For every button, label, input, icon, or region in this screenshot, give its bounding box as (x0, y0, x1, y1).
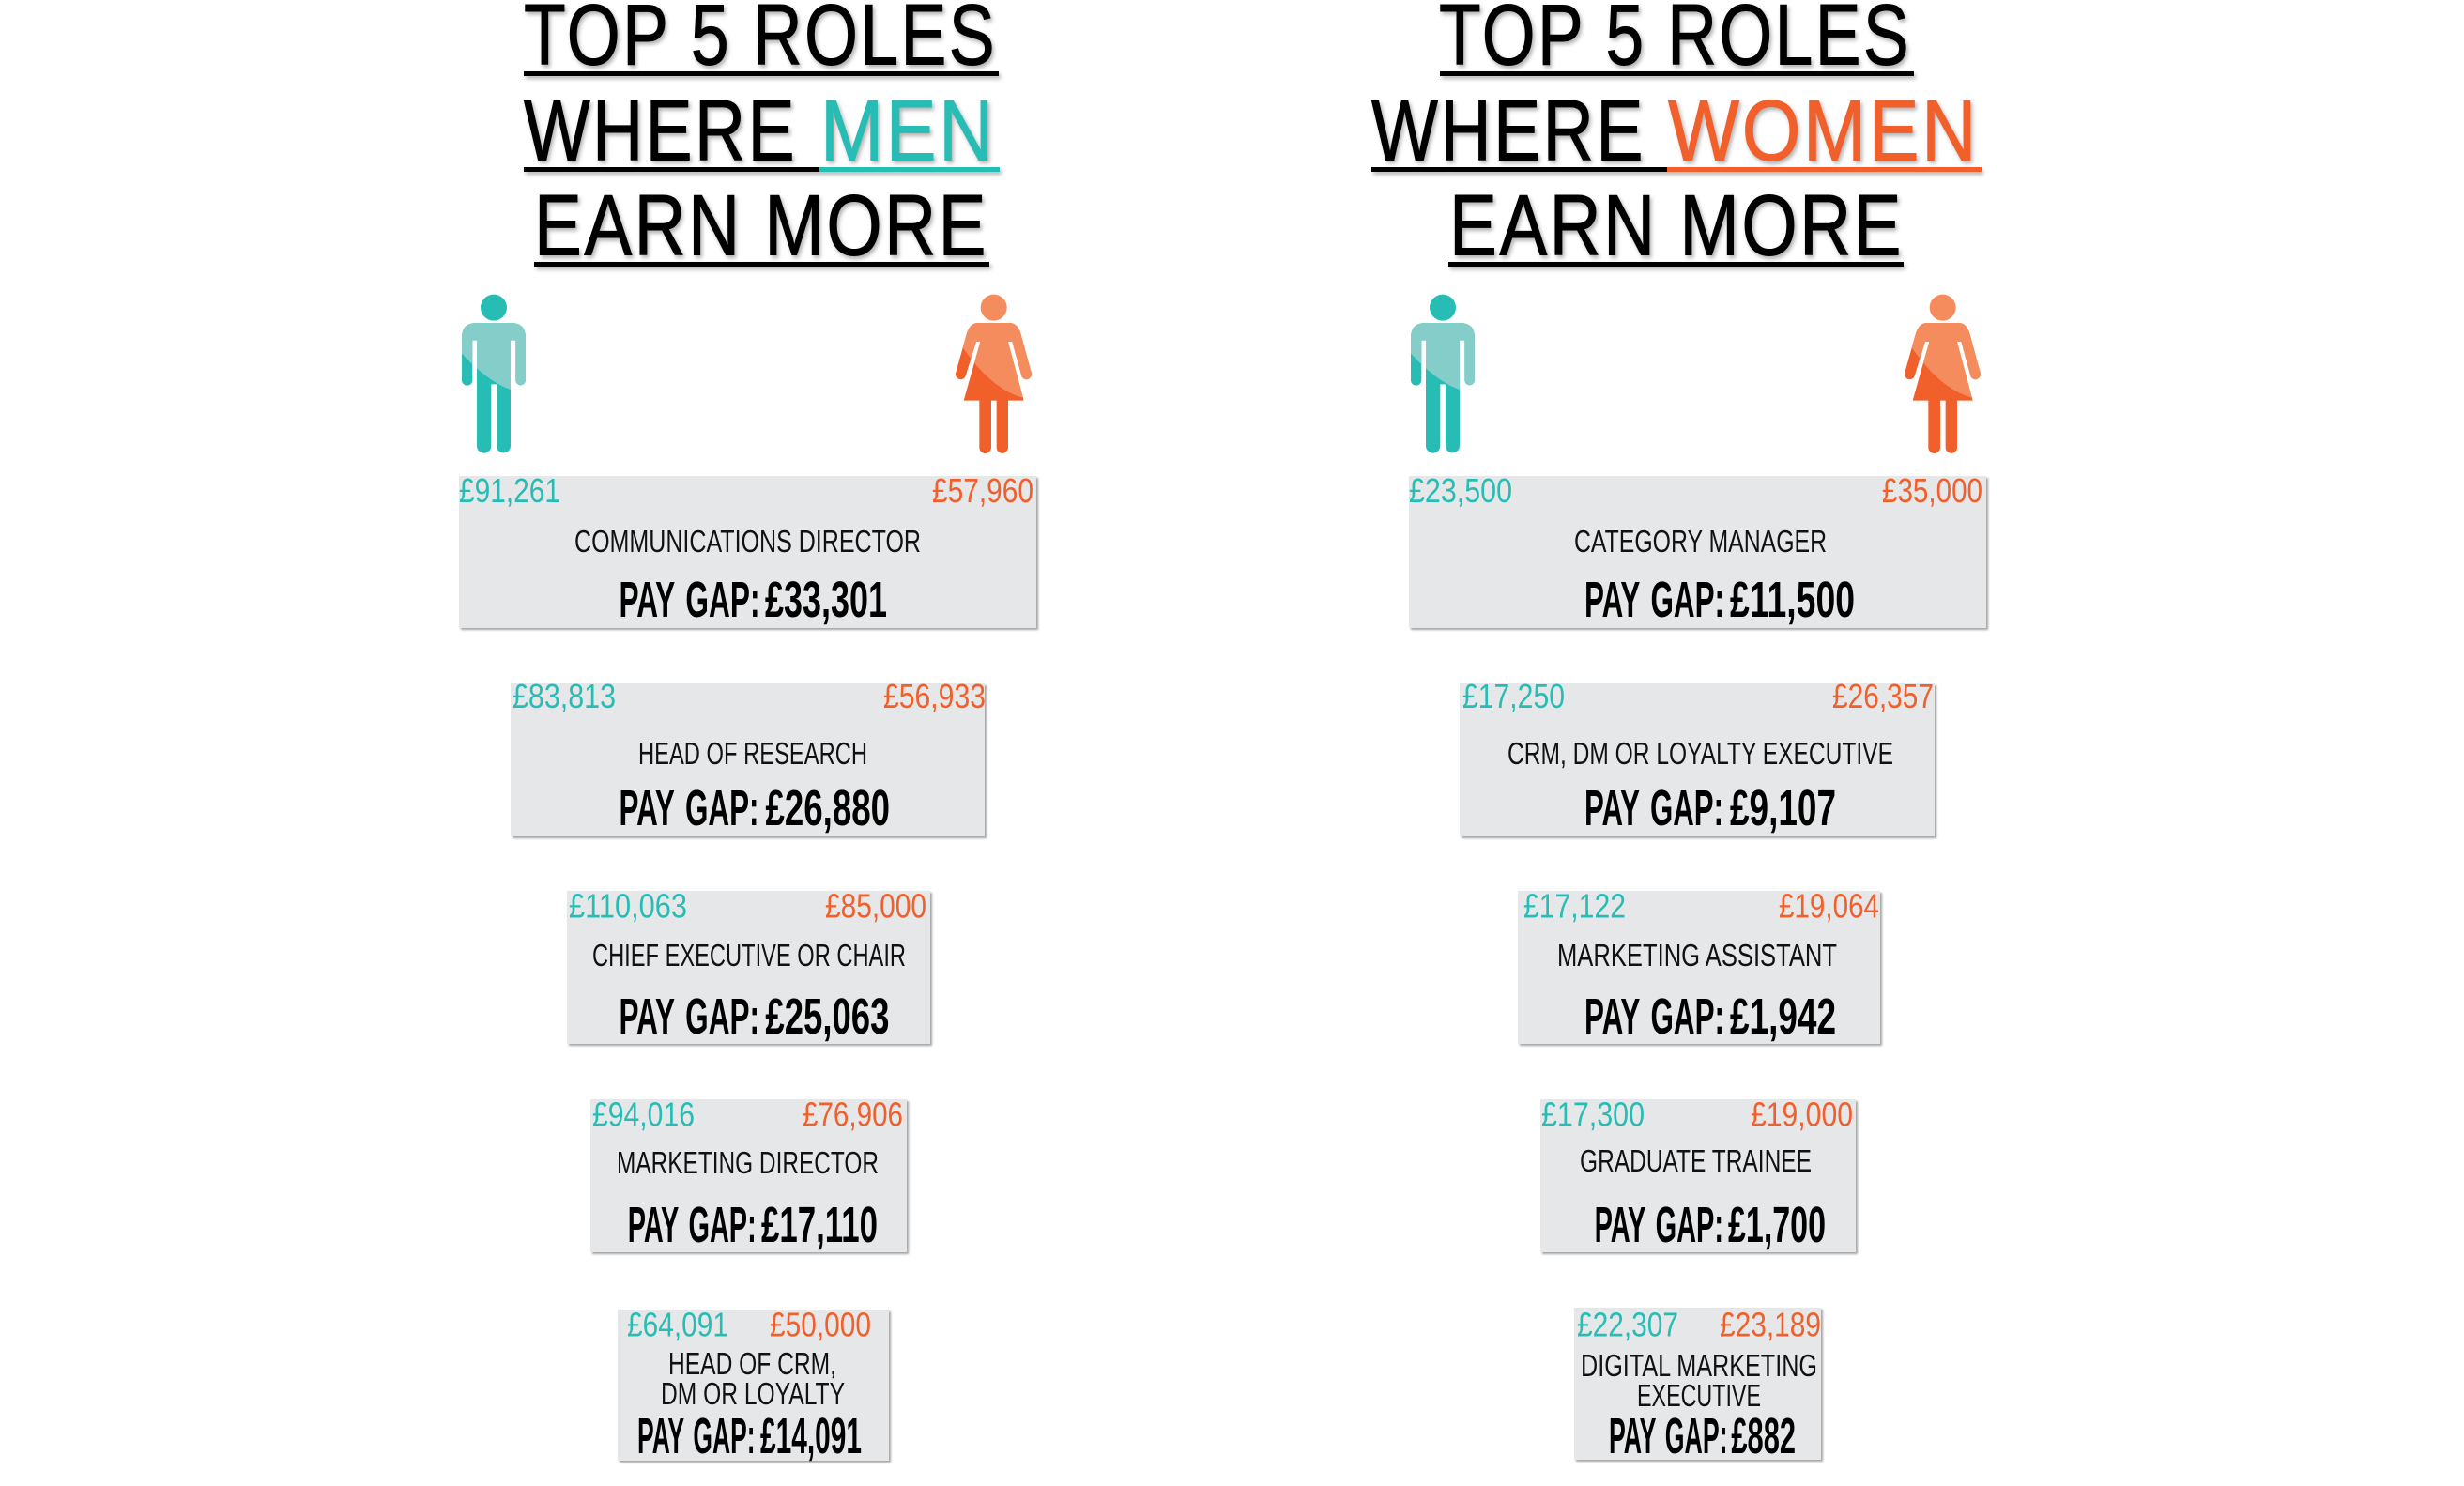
men's salary: £91,261 (459, 471, 560, 510)
role: COMMUNICATIONS DIRECTOR (574, 524, 921, 559)
panel: crm, dm or loyalty executive (1460, 677, 1936, 838)
women's salary: £23,189 (1720, 1305, 1821, 1344)
pay gap: £1,942 (1730, 988, 1836, 1045)
title: top 5 roles where women earn more: WOMEN (1668, 83, 1979, 178)
title: top 5 roles where men earn more: WHERE (524, 83, 797, 178)
title: top 5 roles where women earn more: WHERE (1371, 83, 1645, 178)
men's salary: £83,813 (513, 677, 616, 715)
men's salary: £23,500 (1409, 471, 1512, 510)
role (661, 1346, 845, 1411)
icon: man, right column (1411, 295, 1475, 453)
pay gap: PAY GAP: (620, 780, 758, 836)
pay gap: £17,110 (761, 1197, 878, 1253)
panel: marketing assistant (1518, 886, 1882, 1046)
men's salary: £17,300 (1541, 1095, 1645, 1134)
title: top 5 roles where men earn more: MEN (820, 83, 996, 178)
pay gap: PAY GAP: (1595, 1197, 1723, 1253)
pay gap: PAY GAP: (637, 1408, 756, 1464)
women's salary: £76,906 (803, 1095, 903, 1134)
role: DIGITAL MARKETING (1581, 1348, 1817, 1383)
role: MARKETING DIRECTOR (617, 1145, 879, 1180)
pay gap: PAY GAP: (620, 988, 759, 1045)
role: CATEGORY MANAGER (1574, 524, 1827, 559)
role: EXECUTIVE (1637, 1378, 1761, 1413)
women's salary: £19,000 (1751, 1095, 1853, 1134)
title: top 5 roles where women earn more: EARN MORE (1449, 178, 1904, 274)
role: MARKETING ASSISTANT (1557, 938, 1837, 973)
role: HEAD OF CRM, (668, 1346, 836, 1381)
men's salary: £110,063 (569, 886, 687, 926)
title: top 5 roles where women earn more (1371, 0, 1982, 274)
men's salary: £64,091 (627, 1305, 728, 1344)
women's salary: £50,000 (770, 1305, 871, 1344)
men's salary: £22,307 (1577, 1305, 1678, 1344)
women's salary: £56,933 (883, 677, 986, 715)
panel: category manager (1409, 471, 1988, 630)
pay gap: £14,091 (760, 1408, 862, 1464)
women's salary: £35,000 (1882, 471, 1982, 510)
pay gap: PAY GAP: (628, 1197, 757, 1253)
panel: graduate trainee (1540, 1095, 1858, 1254)
icon: woman, right column (1905, 295, 1981, 453)
role: CHIEF EXECUTIVE OR CHAIR (592, 938, 906, 973)
panel: digital marketing executive (1574, 1305, 1823, 1464)
panel: head of crm, dm or loyalty (618, 1305, 891, 1464)
role: HEAD OF RESEARCH (638, 736, 867, 771)
title: top 5 roles where men earn more (524, 0, 1000, 274)
pay gap: PAY GAP: (1584, 988, 1724, 1045)
pay gap: PAY GAP: (1609, 1408, 1727, 1464)
pay gap: £25,063 (765, 988, 889, 1045)
role: DM OR LOYALTY (661, 1376, 845, 1411)
pay gap: PAY GAP: (620, 572, 760, 628)
icon: woman, left column (956, 295, 1032, 453)
role: CRM, DM OR LOYALTY EXECUTIVE (1507, 736, 1893, 771)
pay gap: £26,880 (766, 780, 890, 836)
role (1581, 1348, 1817, 1413)
panel: chief executive or chair (567, 886, 932, 1046)
panel: communications director (459, 471, 1038, 630)
pay gap: £9,107 (1730, 780, 1836, 836)
pay gap: £11,500 (1730, 572, 1855, 628)
pay gap: £1,700 (1728, 1197, 1826, 1253)
women's salary: £26,357 (1832, 677, 1934, 715)
title: top 5 roles where men earn more: EARN MORE (534, 178, 988, 274)
pay gap: PAY GAP: (1584, 780, 1723, 836)
women's salary: £85,000 (825, 886, 926, 926)
pay gap: PAY GAP: (1584, 572, 1724, 628)
panel: head of research (511, 677, 987, 838)
men's salary: £17,250 (1462, 677, 1565, 715)
role: GRADUATE TRAINEE (1580, 1143, 1812, 1178)
icon: man, left column (462, 295, 526, 453)
panel: marketing director (590, 1095, 909, 1254)
men's salary: £17,122 (1523, 886, 1626, 926)
women's salary: £57,960 (932, 471, 1033, 510)
pay gap: £33,301 (765, 572, 887, 628)
men's salary: £94,016 (592, 1095, 695, 1134)
women's salary: £19,064 (1779, 886, 1879, 926)
pay gap: £882 (1731, 1408, 1796, 1464)
